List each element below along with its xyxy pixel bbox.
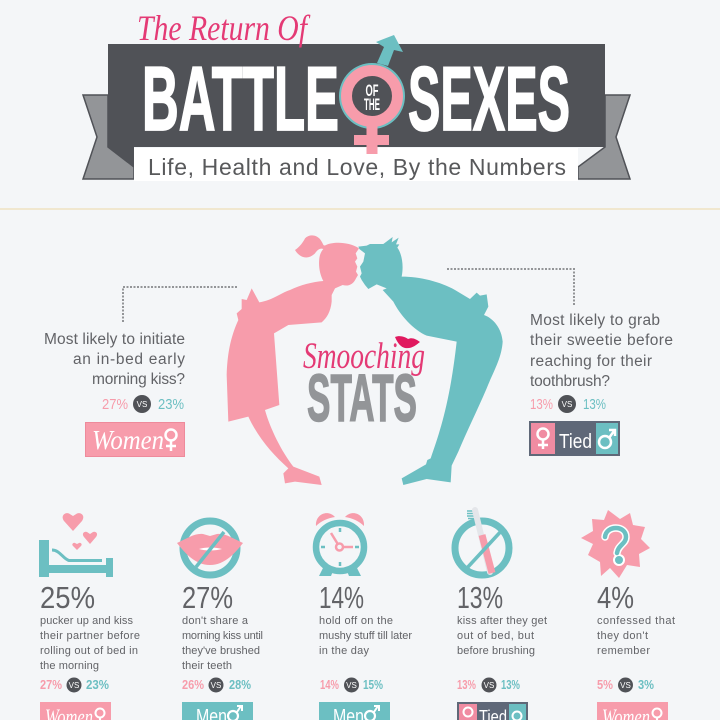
description: they don't: [597, 630, 648, 642]
question text: [44, 331, 185, 388]
description: rolling out of bed in: [40, 645, 138, 657]
badge: tied: [457, 702, 528, 720]
percentages: 26%: [182, 678, 204, 692]
percentages: 5%: [597, 678, 613, 692]
panel: stat 4%: [581, 510, 675, 720]
percentages: 3%: [638, 678, 654, 692]
percentages: [597, 678, 654, 692]
badge: women: Women: [92, 425, 164, 455]
percentages: [530, 395, 606, 413]
percentages: [320, 678, 383, 692]
badge: tied: Tied: [559, 431, 592, 453]
description: [457, 615, 547, 657]
percentages: 13%: [583, 396, 606, 413]
percentages: VS: [346, 681, 357, 690]
description: don't share a: [182, 615, 249, 627]
percentages: VS: [620, 681, 631, 690]
description: before brushing: [457, 645, 535, 657]
subtitle: Life, Health and Love, By the Numbers: [148, 154, 566, 180]
description: hold off on the: [319, 615, 393, 627]
question text: their sweetie before: [530, 332, 673, 349]
description: [319, 615, 412, 657]
heading: battle: BATTLE: [142, 49, 339, 150]
question text: Most likely to grab: [530, 312, 660, 329]
heading: the return of: The Return Of: [137, 8, 311, 48]
percentages: 13%: [530, 396, 553, 413]
percentages: VS: [137, 400, 147, 409]
icon: bed and hearts: [39, 513, 113, 577]
panel: stat 25%: [39, 513, 140, 720]
description: [182, 615, 263, 672]
heading: sexes: SEXES: [408, 49, 570, 150]
icon: lips: [395, 336, 420, 348]
percentages: 14%: [320, 678, 339, 692]
big number: 25%: [40, 580, 95, 615]
subtitle strip: [134, 148, 578, 181]
description: [40, 615, 140, 672]
panel: right question: [529, 312, 673, 456]
description: out of bed, but: [457, 630, 534, 642]
label: of the: [364, 81, 380, 114]
percentages: 27%: [102, 396, 128, 413]
description: their teeth: [182, 660, 232, 672]
description: morning kiss until: [182, 630, 263, 642]
badge: women: [86, 422, 184, 456]
percentages: VS: [484, 681, 494, 690]
big number: 13%: [457, 580, 503, 615]
percentages: 28%: [229, 678, 251, 692]
percentages: 13%: [457, 678, 476, 692]
chart connector: right dotted line: [447, 269, 574, 305]
description: [597, 615, 675, 657]
badge: men: [319, 702, 390, 720]
woman silhouette: [227, 235, 359, 485]
panel: title banner: THE: [364, 95, 380, 114]
percentages: 15%: [363, 678, 383, 692]
panel: title banner: [83, 8, 630, 181]
description: the morning: [40, 660, 99, 672]
description: their partner before: [40, 630, 140, 642]
panel: left question: [44, 331, 185, 456]
percentages: 23%: [158, 396, 184, 413]
question text: reaching for their: [530, 353, 652, 370]
description: pucker up and kiss: [40, 615, 134, 627]
man silhouette: [358, 237, 503, 485]
percentages: 23%: [86, 678, 109, 692]
label: of the: OF: [366, 81, 378, 100]
question text: Most likely to initiate: [44, 331, 185, 348]
percentages: 27%: [40, 678, 62, 692]
description: they've brushed: [182, 645, 260, 657]
heading: smooching: Smooching: [303, 336, 425, 377]
percentages: VS: [69, 681, 79, 690]
description: mushy stuff till later: [319, 630, 412, 642]
badge: tied: [529, 421, 620, 456]
percentages: VS: [211, 681, 221, 690]
question text: toothbrush?: [530, 373, 610, 390]
description: confessed that: [597, 615, 675, 627]
panel: stat 27%: [177, 521, 263, 720]
percentages: VS: [562, 400, 572, 409]
percentages: 13%: [501, 678, 520, 692]
icon: no lips: [177, 521, 243, 575]
icon: male arrow: [376, 35, 403, 66]
question text: morning kiss?: [92, 371, 185, 388]
question text: an in-bed early: [73, 351, 185, 368]
badge: men: [182, 702, 253, 720]
icon: no toothbrush: [455, 510, 509, 575]
chart connector: left dotted line: [123, 287, 237, 323]
big number: 27%: [182, 580, 233, 615]
big number: 4%: [597, 580, 634, 615]
question text: [530, 312, 673, 390]
description: remember: [597, 645, 650, 657]
percentages: [40, 678, 109, 692]
percentages: [102, 395, 184, 413]
icon: venus symbol: [339, 63, 405, 154]
left ribbon tail: [83, 95, 134, 179]
heading: stats: STATS: [307, 361, 417, 436]
right ribbon tail: [578, 95, 630, 179]
percentages: [182, 678, 251, 692]
icon: starburst question mark: [581, 510, 650, 578]
banner body: [108, 44, 605, 167]
panel: stat 13%: [455, 510, 547, 720]
illustration: kissing couple: [227, 235, 503, 485]
panel: stat 14%: [316, 513, 412, 720]
description: kiss after they get: [457, 615, 547, 627]
icon: alarm clock: [316, 513, 364, 576]
percentages: [457, 678, 520, 692]
big number: 14%: [319, 580, 364, 615]
description: in the day: [319, 645, 370, 657]
